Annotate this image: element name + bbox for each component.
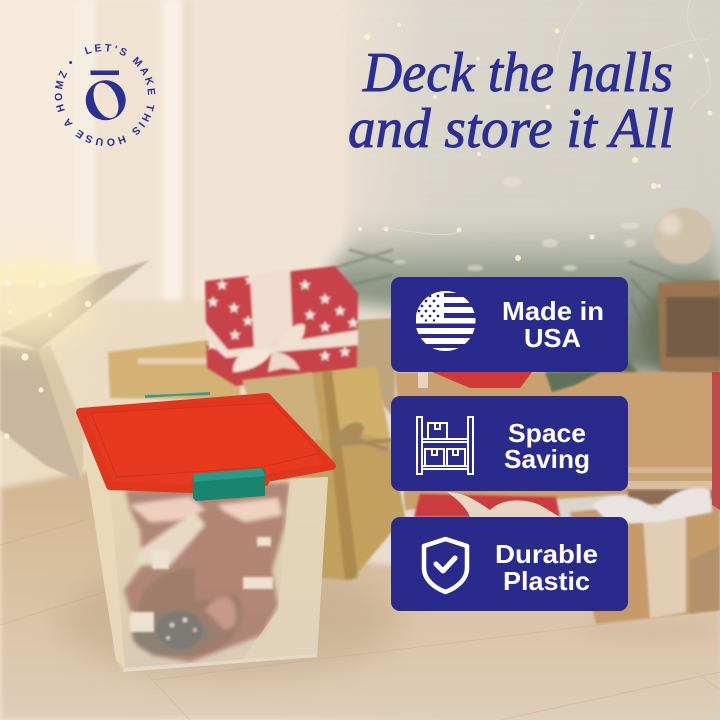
label: Made in	[502, 296, 604, 326]
light star decoration	[0, 260, 150, 482]
small red gift at right	[432, 372, 532, 388]
gingerbread contents	[124, 482, 290, 662]
label	[504, 418, 590, 474]
title: and store it All	[348, 98, 674, 160]
red gift	[205, 266, 359, 386]
title: Deck the halls	[362, 42, 673, 104]
dark gap under tan box	[628, 490, 718, 506]
icing details	[130, 497, 205, 522]
label	[502, 296, 604, 353]
gold box behind	[108, 340, 240, 400]
label: Durable	[495, 539, 598, 569]
lid inner recess	[91, 403, 320, 477]
floor plank lines	[0, 520, 720, 720]
brand logo	[54, 44, 156, 146]
small green sprig	[545, 372, 600, 392]
ornament	[653, 208, 713, 264]
warm glow	[0, 255, 90, 345]
floor shadow	[60, 562, 400, 678]
label: Plastic	[503, 566, 590, 596]
tree mass	[325, 0, 720, 372]
logo bar	[90, 70, 119, 75]
icon: US flag	[416, 290, 476, 354]
front latch	[193, 468, 265, 501]
label	[495, 539, 598, 596]
gold front gift	[242, 366, 405, 580]
logo letter o	[86, 80, 126, 120]
floor	[0, 472, 720, 720]
badge: made in USA	[391, 277, 628, 372]
tree branches	[322, 250, 700, 360]
badge: space saving	[391, 396, 628, 491]
label: USA	[524, 323, 581, 353]
lid	[80, 397, 332, 489]
storage bin product	[80, 392, 332, 672]
label: Space	[508, 418, 586, 448]
lower red gift	[414, 494, 560, 517]
icon: shelf	[417, 417, 473, 474]
circular slogan: LET'S MAKE THIS HOUSE A HOMZ •	[54, 44, 156, 146]
title	[348, 42, 674, 160]
bin translucent sheen	[82, 440, 125, 668]
dark framed box	[658, 280, 720, 372]
pine cone	[157, 611, 203, 649]
ribbon patches	[130, 537, 273, 632]
rear latch	[145, 392, 210, 398]
bin body	[82, 440, 328, 672]
icon: shield check	[424, 539, 467, 592]
door panels	[0, 0, 350, 490]
badge: durable plastic	[391, 517, 628, 611]
tree snowflake highlights	[394, 177, 640, 271]
large tan box	[395, 372, 716, 510]
fairy lights	[4, 280, 91, 438]
label: Saving	[504, 444, 590, 474]
lower right box	[570, 488, 720, 624]
